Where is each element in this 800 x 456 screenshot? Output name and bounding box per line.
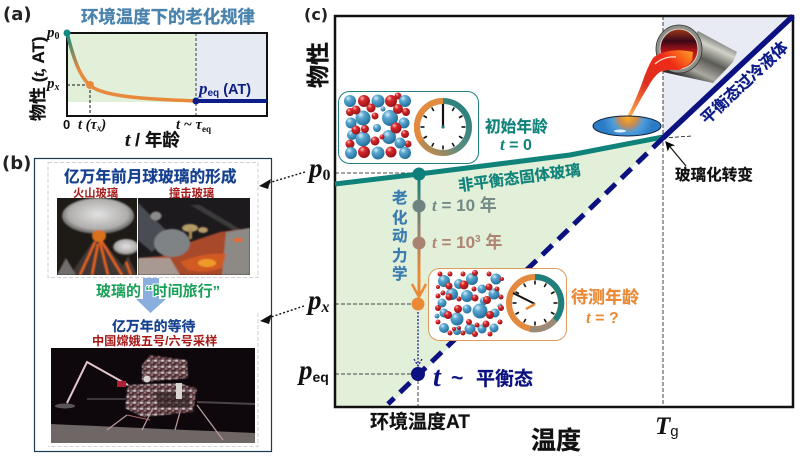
arrow: glass transition — [666, 142, 686, 166]
tick labels: 0 — [322, 167, 330, 184]
panel (a): aging chart — [29, 25, 267, 151]
aging curve — [67, 33, 196, 101]
dotted relaxation arrow — [414, 312, 422, 366]
label: liquid line: 平衡态过冷液体 — [697, 38, 792, 128]
equilibrium line — [196, 99, 267, 103]
axes — [335, 16, 793, 407]
label: aging dynamics: 动 — [392, 227, 408, 245]
panel (a): aging chart: 物性 (t, AT) — [29, 36, 48, 121]
region: glass zone — [335, 137, 663, 407]
label (a): (a) — [3, 4, 32, 25]
panel (a): aging chart: (AT) — [219, 82, 251, 98]
clock: aged — [509, 277, 561, 329]
label: t=10^3: t = 10 — [432, 233, 475, 252]
image: volcano — [57, 198, 139, 275]
image: impact — [138, 198, 250, 275]
data points — [412, 168, 426, 180]
label: aging dynamics: 老 — [392, 189, 408, 207]
panel (a): aging chart: p — [47, 25, 54, 41]
aging arrow — [418, 174, 420, 296]
panel (c): main phase diagram: T — [655, 413, 670, 440]
label: glass line: 非平衡态固体玻璃 — [457, 160, 582, 195]
callout: initial structure and clock — [338, 92, 478, 164]
panel (c): main phase diagram: 环境温度AT — [370, 410, 470, 433]
subheading: impact glass: 撞击玻璃 — [169, 186, 214, 200]
region: liquid zone — [663, 16, 793, 138]
label: equilibrium: t — [433, 362, 442, 393]
panel (a): aging chart: t (τ — [78, 117, 97, 133]
caption: time travel of glass: 玻璃的 “时间旅行” — [96, 282, 220, 300]
panel (c): main phase diagram: ~ — [451, 367, 463, 390]
subheading: volcanic glass: 火山玻璃 — [73, 186, 118, 200]
label: t=?: t = ? — [586, 308, 619, 327]
label: t=0: t = 0 — [500, 135, 532, 154]
panel (c): main phase diagram — [297, 16, 793, 440]
panel (a): aging chart: eq — [208, 88, 219, 99]
label: aging dynamics: 化 — [392, 208, 408, 227]
melt pool — [593, 116, 661, 136]
panel (c): main phase diagram: g — [670, 423, 679, 440]
heading: Chang'e sampling: 中国嫦娥五号/六号采样 — [92, 333, 217, 348]
molecules: initial — [344, 92, 412, 160]
label: t=10: t = 10 年 — [432, 195, 497, 215]
panel (c): main phase diagram: 平衡态 — [476, 367, 533, 390]
panel (a): aging chart: t / 年龄 — [125, 130, 180, 151]
line: equilibrium extrapolation — [388, 138, 663, 404]
panel (a): aging chart: x — [54, 82, 60, 93]
panel (a): aging chart: ) — [99, 117, 106, 133]
image: lunar lander — [51, 348, 255, 443]
melt stream — [627, 50, 693, 117]
label: initial age: 初始年龄 — [485, 117, 548, 136]
panel (c): main phase diagram: p — [299, 355, 312, 385]
crucible body — [663, 31, 737, 83]
panel (a): aging chart: x — [96, 123, 102, 133]
arrowheads — [259, 179, 272, 324]
panel (c): main phase diagram: eq — [312, 369, 329, 385]
arrow: time travel — [136, 278, 166, 313]
y-axis title: 物性 — [305, 42, 331, 88]
label (b): (b) — [2, 153, 31, 174]
panel (c): main phase diagram: p — [308, 285, 322, 315]
label: age to be determined: 待测年龄 — [571, 287, 639, 307]
line: non-equilibrium glass — [335, 137, 663, 184]
label (c): (c) — [304, 5, 328, 24]
panel (a): aging chart: p — [199, 79, 208, 98]
panel (a): aging chart: p — [47, 76, 54, 92]
dotted pointer arrows — [265, 172, 305, 319]
panel (b): lunar glass — [34, 158, 272, 452]
heading: billion-year wait: 亿万年的等待 — [112, 318, 195, 334]
tick labels: p — [309, 153, 322, 183]
panel (a): aging chart: t ~ τ — [176, 117, 202, 133]
label: aging dynamics: 力 — [392, 247, 408, 265]
panel (a): aging chart: 0 — [54, 31, 60, 42]
panel (a) title: 环境温度下的老化规律 — [81, 7, 255, 27]
line: supercooled liquid — [663, 16, 793, 138]
label: glass transition: 玻璃化转变 — [675, 165, 753, 184]
panel (b) heading: 亿万年前月球玻璃的形成 — [64, 167, 237, 186]
crucible opening — [656, 25, 702, 73]
x-axis title: 温度 — [531, 427, 581, 455]
icon: pouring crucible and melt — [593, 25, 737, 136]
molecules: aged — [434, 270, 504, 337]
panel (c): main phase diagram: x — [320, 299, 330, 316]
label: t=10^3: 年 — [481, 232, 502, 252]
clock: t=0 — [417, 101, 469, 153]
label: t=10^3: 3 — [475, 234, 481, 245]
panel (a): aging chart: 0 — [63, 117, 70, 132]
label: aging dynamics: 学 — [392, 264, 408, 283]
panel (a): aging chart: eq — [202, 124, 211, 134]
callout: aged structure and clock — [428, 268, 566, 340]
dashed guides — [335, 136, 692, 407]
